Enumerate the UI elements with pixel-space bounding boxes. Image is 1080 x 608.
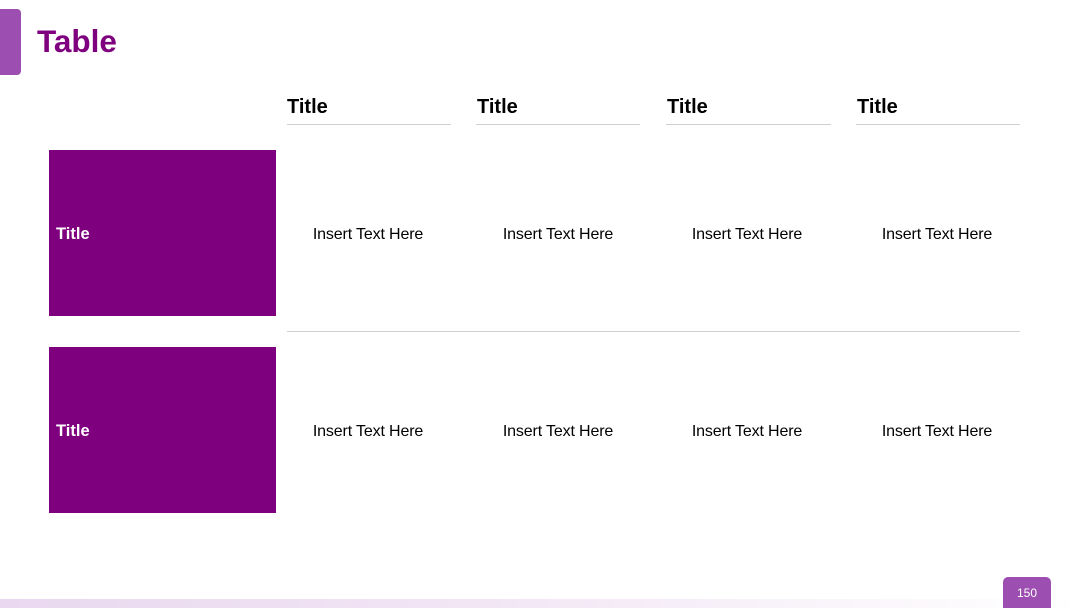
row 1 cell 1: Insert Text Here (313, 226, 423, 243)
column heading 2: Title (477, 96, 518, 118)
row 2 cell 3: Insert Text Here (692, 423, 802, 440)
row 2 cell 4: Insert Text Here (882, 423, 992, 440)
row 1 cell 4: Insert Text Here (882, 226, 992, 243)
title: Table (37, 23, 117, 59)
page number badge: 150 (1017, 586, 1037, 600)
row 1 cell 3: Insert Text Here (692, 226, 802, 243)
row 1 cell 2: Insert Text Here (503, 226, 613, 243)
row 2 cell 1: Insert Text Here (313, 423, 423, 440)
column heading 3: Title (667, 96, 708, 118)
row 2 header panel (49, 347, 276, 513)
row 1 header label: Title (56, 225, 90, 243)
page number badge (1003, 577, 1051, 608)
column heading 4: Title (857, 96, 898, 118)
column heading 1: Title (287, 96, 328, 118)
row 2 header label: Title (56, 422, 90, 440)
title accent tab (0, 9, 21, 75)
row 2 cell 2: Insert Text Here (503, 423, 613, 440)
footer gradient bar (0, 599, 1080, 608)
row 1 header panel (49, 150, 276, 316)
